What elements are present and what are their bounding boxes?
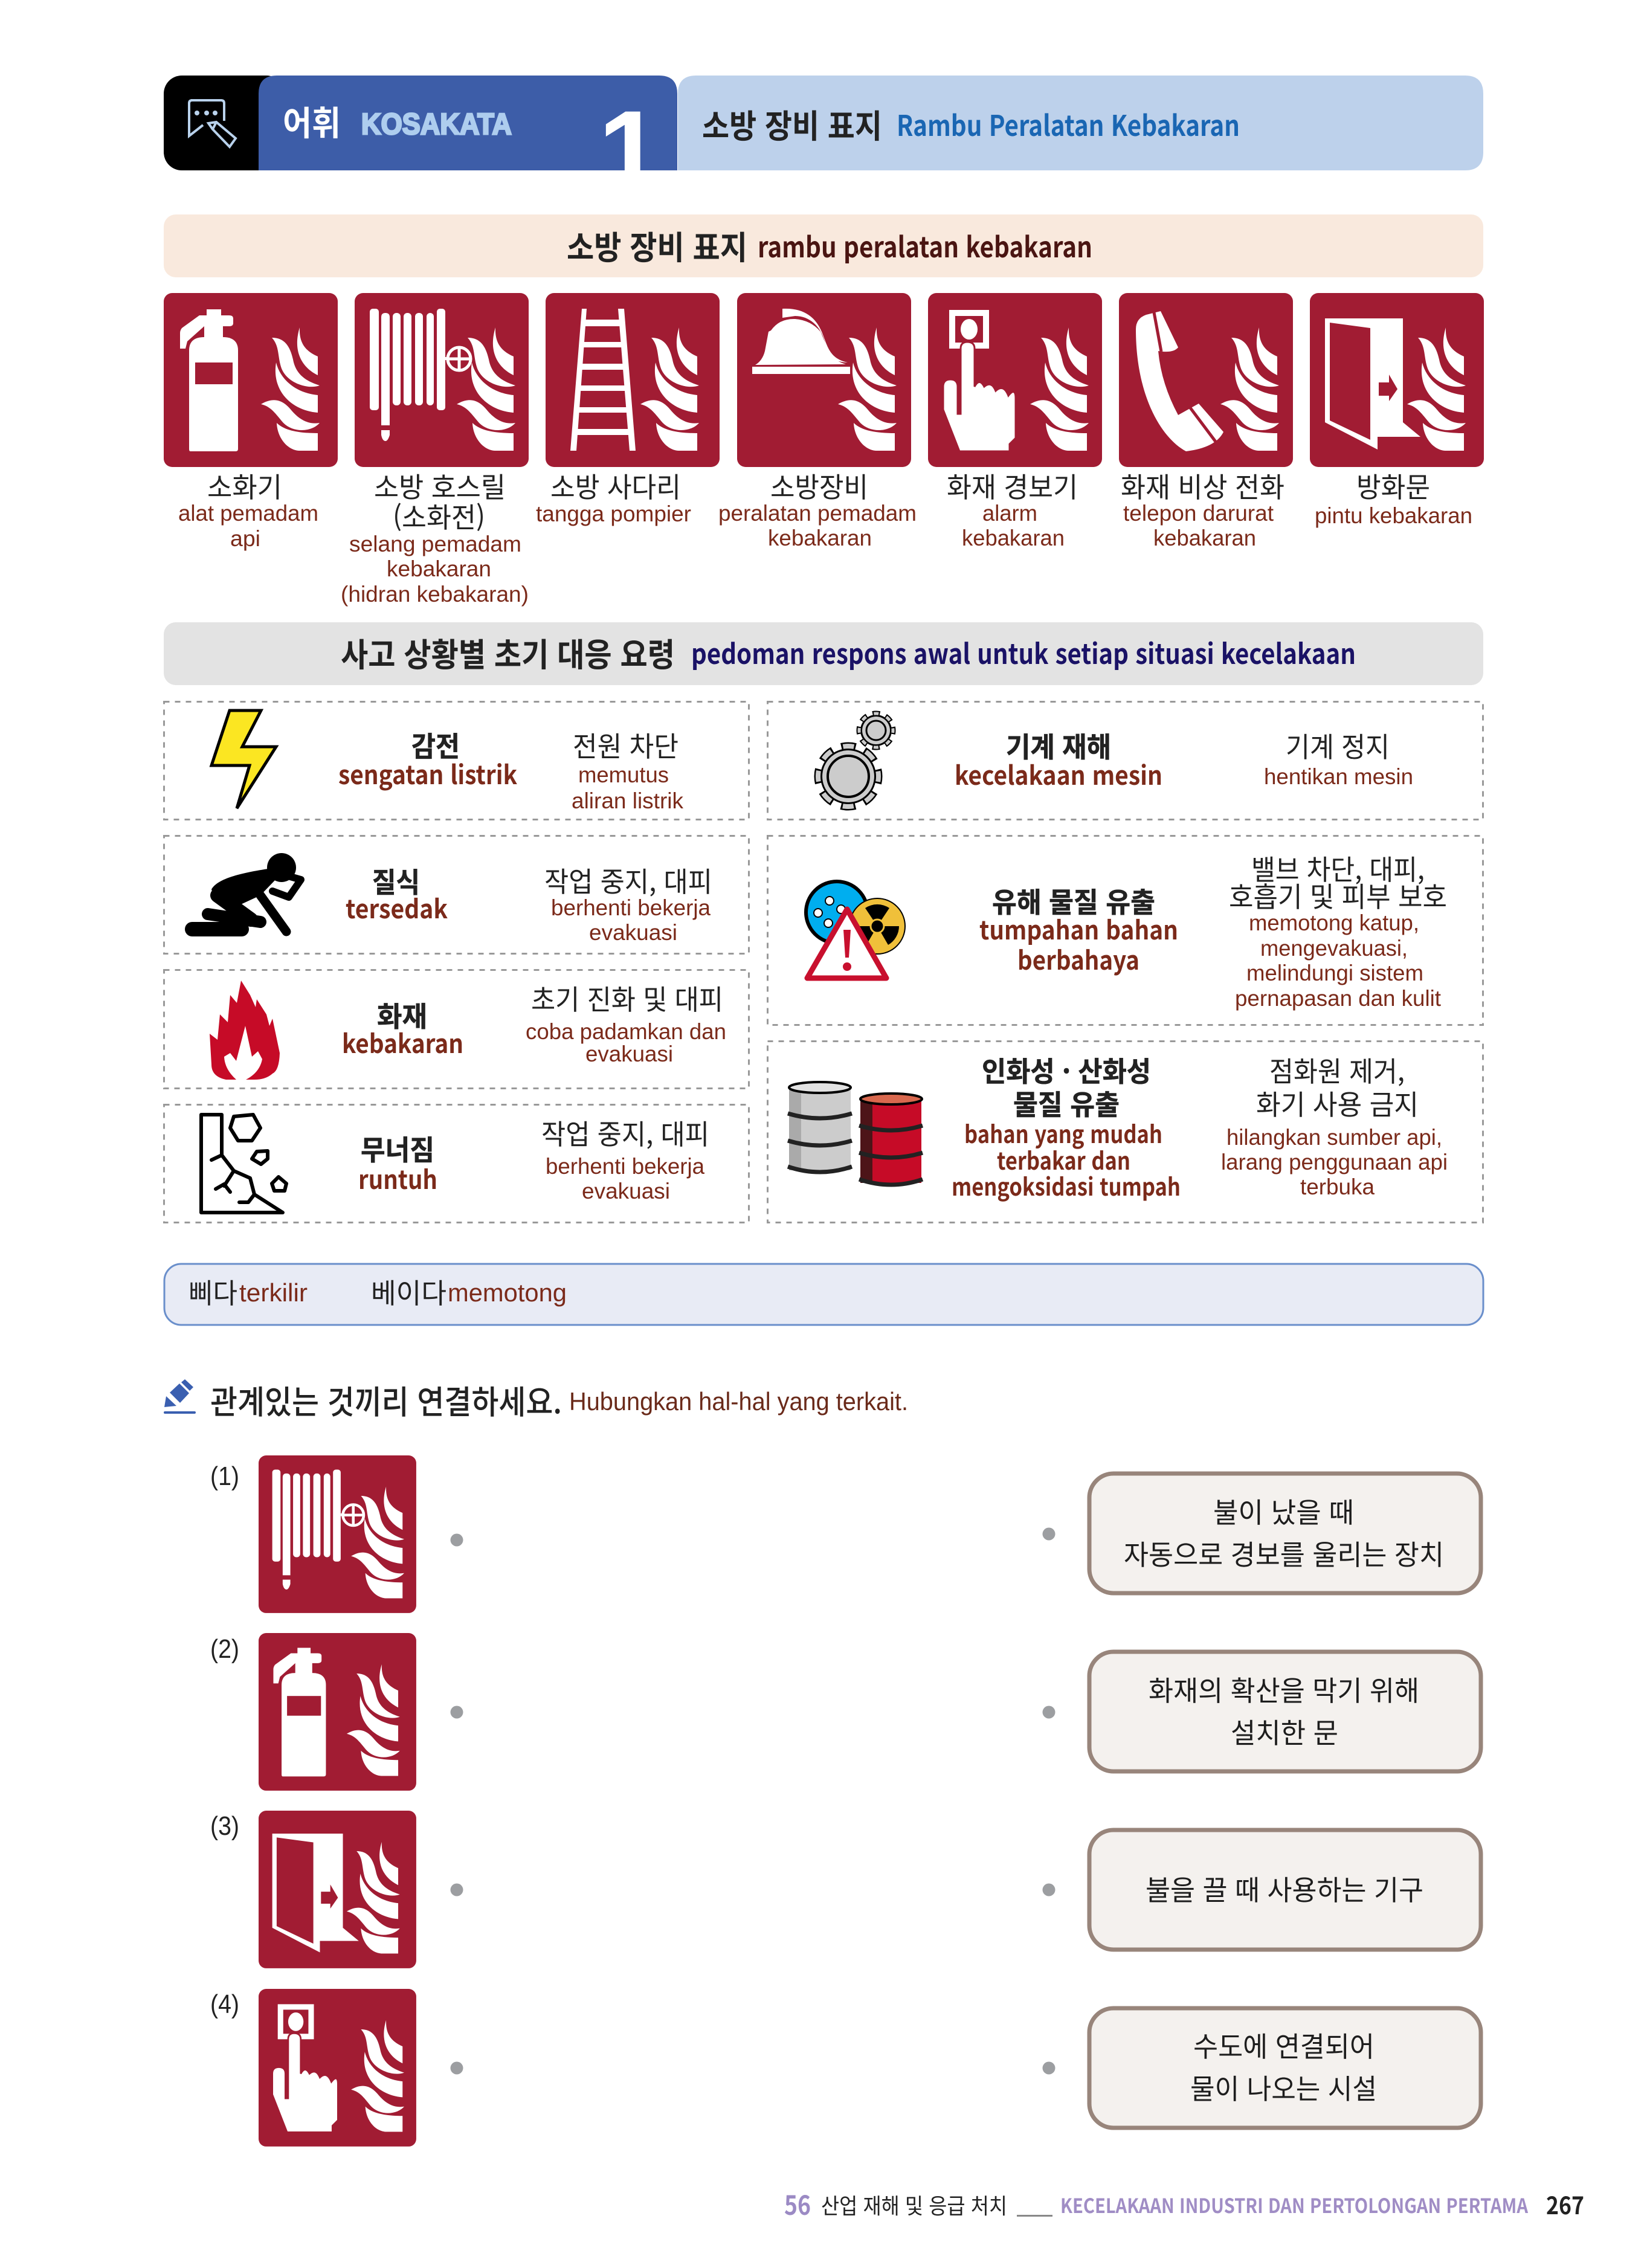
header: topic band — [678, 76, 1483, 170]
panel: flammable spill: mengoksidasi tumpah — [952, 1168, 1181, 1203]
panel: electric shock: aliran listrik — [572, 788, 683, 813]
label: hose reel: kebakaran — [387, 556, 491, 581]
exercise item 1 — [210, 1455, 463, 1613]
panel: hazardous spill: tumpahan bahan — [979, 910, 1178, 947]
label: ladder: 소방 사다리 — [550, 466, 681, 506]
label: extinguisher: 소화기 — [207, 466, 282, 506]
label: hose reel: (소화전) — [393, 496, 485, 536]
answer box 4: 물이 나오는 시설 — [1190, 2067, 1377, 2107]
icon: lightning bolt — [211, 710, 276, 808]
panel: collapse: 작업 중지, 대피 — [541, 1113, 709, 1153]
heading: 어휘: 어휘 — [283, 97, 341, 146]
answer box 4 — [1043, 2008, 1481, 2128]
panel: hazardous spill: berbahaya — [1017, 940, 1139, 978]
answer box 3 — [1043, 1830, 1481, 1950]
topic title indonesian: Rambu Peralatan Kebakaran — [897, 103, 1240, 144]
panel: electric shock: 감전 — [411, 725, 460, 765]
footer: 산업 재해 및 응급 처치 — [821, 2189, 1007, 2220]
exercise item 2: (2) — [210, 1634, 239, 1664]
exercise instruction: 관계있는 것끼리 연결하세요. — [210, 1376, 562, 1423]
panel: flammable spill: terbuka — [1300, 1174, 1375, 1199]
label: extinguisher — [178, 466, 318, 551]
footer: KECELAKAAN INDUSTRI DAN PERTOLONGAN PERTAMA — [1060, 2190, 1529, 2219]
panel: vocabulary note: terkilir — [239, 1278, 308, 1307]
panel: flammable spill: 인화성 · 산화성 — [982, 1050, 1151, 1090]
panel: hazardous spill: 호흡기 및 피부 보호 — [1229, 875, 1447, 915]
exercise instruction: Hubungkan hal-hal yang terkait. — [569, 1387, 908, 1416]
panel: machine accident: hentikan mesin — [1264, 764, 1413, 789]
answer box 4: 수도에 연결되어 — [1193, 2025, 1375, 2065]
footer — [784, 2184, 1584, 2223]
header: vocabulary tab — [259, 76, 677, 214]
panel: hazardous spill — [767, 836, 1483, 1025]
icon: fire door sign — [1310, 293, 1484, 467]
icon: chat with pencil — [189, 100, 236, 147]
icon: collapsing wall — [201, 1115, 286, 1213]
label: hose reel: 소방 호스릴 — [374, 466, 506, 506]
label: alarm: 화재 경보기 — [947, 466, 1078, 506]
panel: hazardous spill: melindungi sistem — [1246, 961, 1423, 985]
heading: KOSAKATA: KOSAKATA — [361, 108, 512, 141]
panel: flammable spill: larang penggunaan api — [1221, 1150, 1448, 1174]
panel: flammable spill: 점화원 제거, — [1269, 1050, 1405, 1090]
label: fire equipment — [718, 466, 917, 550]
panel: choking: 질식 — [372, 861, 420, 901]
icon: fire equipment sign — [737, 293, 911, 467]
panel: fire equipment sign heading: 소방 장비 표지 — [567, 221, 747, 269]
label: fire door: pintu kebakaran — [1315, 503, 1472, 528]
panel: fire: 화재 — [377, 995, 427, 1035]
panel: choking: berhenti bekerja — [551, 895, 711, 920]
panel: choking: evakuasi — [589, 920, 677, 945]
exercise item 3: (3) — [210, 1811, 239, 1841]
topic title korean: 소방 장비 표지 — [702, 100, 882, 147]
panel: vocabulary note: memotong — [448, 1278, 567, 1307]
panel: machine accident: kecelakaan mesin — [955, 755, 1162, 793]
panel: fire — [164, 970, 749, 1089]
panel: flammable spill: 화기 사용 금지 — [1256, 1083, 1419, 1123]
panel: hazardous spill: 밸브 차단, 대피, — [1251, 848, 1425, 888]
panel: electric shock: memutus — [578, 762, 669, 787]
answer box 2: 설치한 문 — [1231, 1712, 1338, 1751]
panel: choking: 작업 중지, 대피 — [544, 860, 712, 900]
panel: collapse: evakuasi — [582, 1179, 670, 1203]
panel: hazardous spill: memotong katup, — [1249, 910, 1419, 935]
panel: fire: 초기 진화 및 대피 — [531, 978, 723, 1018]
label: fire equipment: kebakaran — [768, 526, 872, 550]
panel: hazardous spill: pernapasan dan kulit — [1235, 986, 1442, 1011]
label: ladder: tangga pompier — [536, 501, 691, 526]
panel: flammable spill: bahan yang mudah — [964, 1115, 1162, 1150]
label: fire door — [1315, 466, 1472, 528]
label: alarm: kebakaran — [962, 526, 1065, 550]
panel: flammable spill: terbakar dan — [997, 1142, 1130, 1177]
answer box 2 — [1043, 1652, 1481, 1771]
label: hose reel: (hidran kebakaran) — [341, 582, 529, 607]
panel: hazardous spill: mengevakuasi, — [1260, 936, 1408, 961]
panel: response guide heading — [164, 622, 1483, 685]
icon: flame — [210, 981, 280, 1080]
panel: machine accident — [767, 702, 1483, 819]
exercise item 2 — [210, 1633, 463, 1791]
panel: electric shock: 전원 차단 — [573, 725, 678, 765]
panel: electric shock: sengatan listrik — [338, 755, 517, 792]
icon: pencil — [164, 1379, 196, 1414]
icon: gears — [818, 714, 893, 807]
panel: vocabulary note: 삐다 — [189, 1272, 237, 1312]
label: alarm — [947, 466, 1078, 550]
exercise item 3 — [210, 1811, 463, 1968]
panel: collapse: berhenti bekerja — [546, 1154, 704, 1179]
label: emergency phone: kebakaran — [1153, 526, 1256, 550]
panel: collapse — [164, 1104, 749, 1223]
panel: flammable spill: 물질 유출 — [1013, 1083, 1120, 1123]
panel: vocabulary note — [164, 1264, 1483, 1325]
answer box 1: 불이 났을 때 — [1213, 1491, 1354, 1531]
exercise item 4 — [210, 1989, 463, 2147]
panel: collapse: runtuh — [358, 1159, 437, 1197]
label: hose reel: selang pemadam — [349, 532, 521, 556]
icon: extinguisher sign — [164, 293, 338, 467]
header: icon tab — [164, 76, 285, 170]
lesson number: 1 — [598, 87, 662, 214]
panel: vocabulary note: 베이다 — [371, 1272, 446, 1312]
label: ladder — [536, 466, 691, 526]
panel: response guide heading: pedoman respons awal untuk setiap situasi kecelakaan — [691, 633, 1356, 672]
exercise item 4: (4) — [210, 1989, 239, 2019]
label: emergency phone: telepon darurat — [1123, 501, 1274, 526]
panel: flammable spill: hilangkan sumber api, — [1226, 1125, 1442, 1150]
label: fire door: 방화문 — [1356, 466, 1430, 506]
panel: choking — [164, 836, 749, 953]
answer box 3: 불을 끌 때 사용하는 기구 — [1146, 1869, 1423, 1909]
answer box 1: 자동으로 경보를 울리는 장치 — [1124, 1533, 1444, 1573]
panel: machine accident: 기계 재해 — [1006, 726, 1111, 765]
panel: response guide heading: 사고 상황별 초기 대응 요령 — [341, 628, 675, 676]
panel: collapse: 무너짐 — [361, 1129, 434, 1168]
panel: flammable spill — [767, 1042, 1483, 1223]
icon: barrels — [788, 1082, 923, 1185]
answer box 2: 화재의 확산을 막기 위해 — [1149, 1669, 1419, 1709]
icon: hazard symbols — [806, 881, 905, 978]
footer: 267 — [1546, 2186, 1584, 2221]
panel: fire: evakuasi — [585, 1042, 673, 1066]
icon: alarm sign — [928, 293, 1102, 467]
exercise item 1: (1) — [210, 1461, 239, 1491]
label: alarm: alarm — [982, 501, 1037, 526]
label: fire equipment: 소방장비 — [770, 466, 868, 506]
footer: 56 — [784, 2184, 811, 2223]
answer box 1 — [1043, 1474, 1481, 1593]
label: hose reel — [341, 466, 529, 607]
panel: machine accident: 기계 정지 — [1286, 726, 1390, 765]
panel: choking: tersedak — [346, 889, 448, 926]
label: extinguisher: alat pemadam — [178, 501, 318, 526]
label: emergency phone — [1121, 466, 1284, 550]
panel: fire: coba padamkan dan — [526, 1019, 726, 1044]
panel: fire equipment sign heading: rambu peralatan kebakaran — [758, 224, 1092, 266]
panel: hazardous spill: 유해 물질 유출 — [992, 881, 1155, 921]
panel: fire equipment sign heading — [164, 214, 1483, 277]
icon: emergency phone sign — [1119, 293, 1293, 467]
panel: fire: kebakaran — [342, 1023, 463, 1061]
icon: hose reel sign — [355, 293, 529, 467]
label: extinguisher: api — [230, 526, 260, 551]
exercise instruction — [210, 1376, 908, 1423]
label: emergency phone: 화재 비상 전화 — [1121, 466, 1284, 506]
icon: ladder sign — [546, 293, 720, 467]
panel: electric shock — [164, 702, 749, 819]
icon: choking person — [192, 853, 301, 932]
label: fire equipment: peralatan pemadam — [718, 501, 917, 526]
